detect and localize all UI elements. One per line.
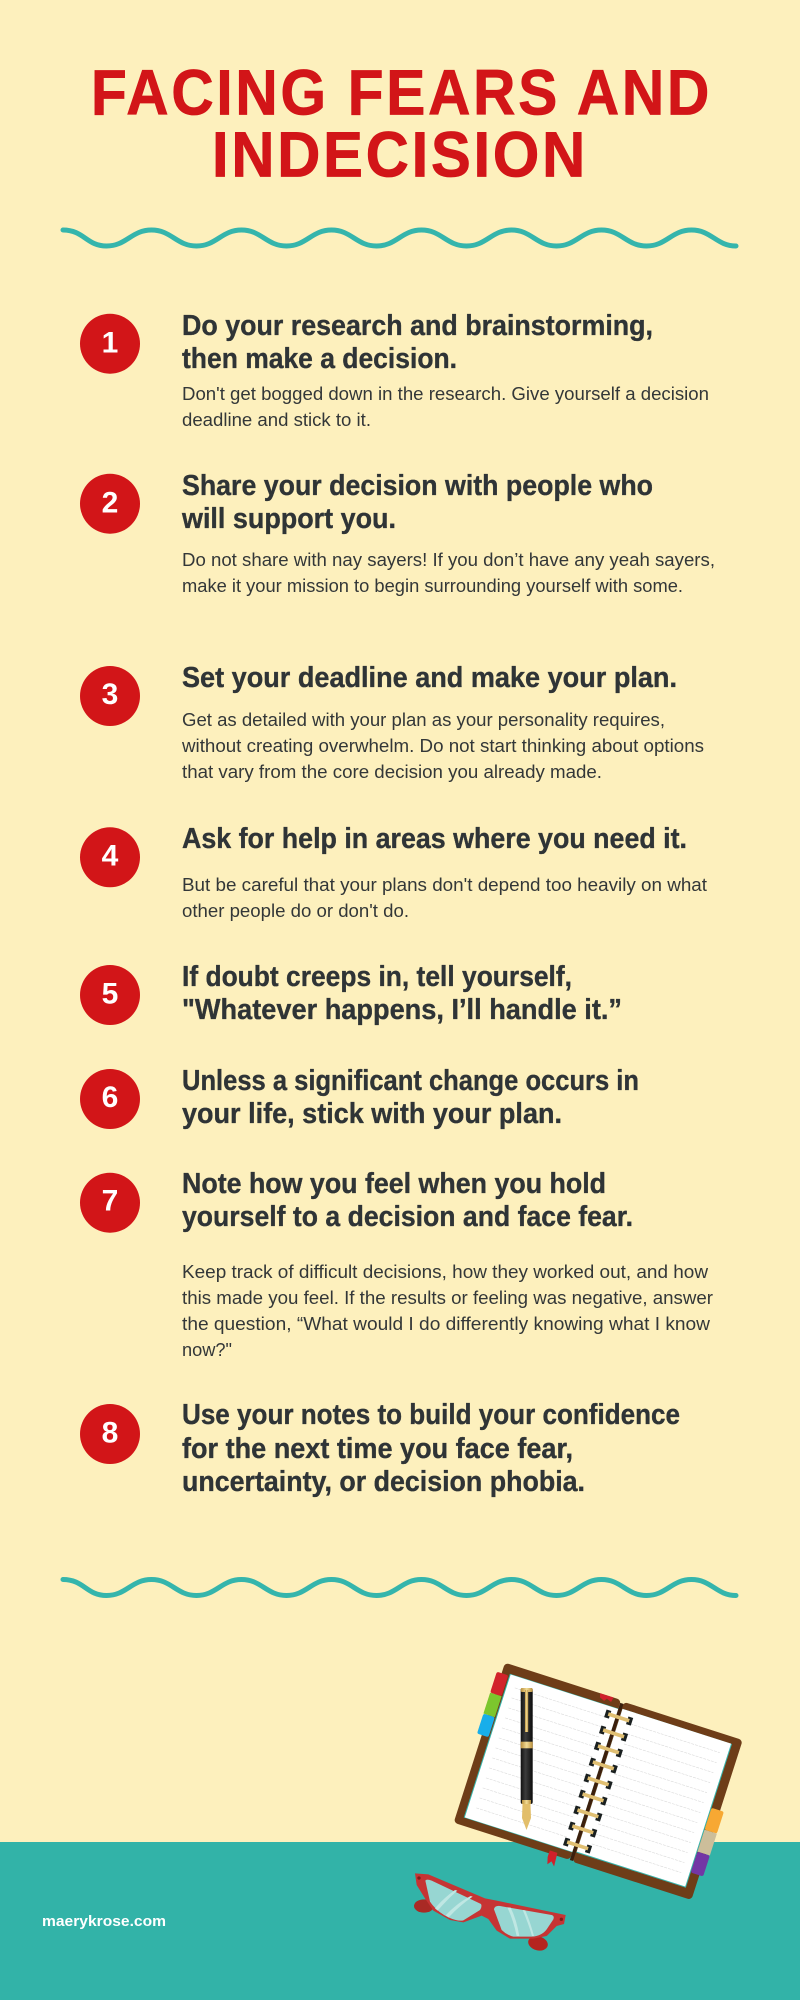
number badge 1 [80, 314, 140, 374]
step 7 heading: Note how you feel when you hold [182, 1168, 606, 1200]
number badge 5 [80, 965, 140, 1025]
step 8 heading [182, 1399, 680, 1498]
step 1 heading: Do your research and brainstorming, [182, 310, 653, 342]
frame rivets [417, 1876, 563, 1921]
step 5 [80, 961, 622, 1026]
number badge 4: 4 [102, 840, 119, 872]
step 2 text [182, 550, 715, 596]
step 8 heading: Use your notes to build your confidence [182, 1399, 680, 1431]
top wavy divider [63, 230, 736, 246]
left page [464, 1674, 618, 1852]
number badge 8: 8 [102, 1416, 118, 1450]
step 4 [80, 823, 707, 921]
title [91, 56, 712, 190]
step 6 heading: Unless a significant change occurs in [182, 1065, 639, 1097]
step 8 heading: uncertainty, or decision phobia. [182, 1466, 585, 1498]
number badge 3: 3 [102, 678, 118, 711]
step 4 text: But be careful that your plans don't depend too heavily on what [182, 875, 707, 895]
number badge 8 [80, 1404, 140, 1464]
title: INDECISION [212, 118, 588, 190]
step 3 text [181, 710, 704, 782]
step 1 heading: then make a decision. [182, 343, 457, 375]
left index tabs [477, 1672, 508, 1737]
step 1 text: deadline and stick to it. [182, 410, 371, 430]
number badge 6 [80, 1069, 140, 1129]
step 3 text: Get as detailed with your plan as your personality requires, [182, 710, 665, 730]
step 8 heading: for the next time you face fear, [182, 1433, 573, 1465]
number badge 1: 1 [102, 326, 118, 360]
number badge 3 [80, 666, 140, 726]
footer website: maerykrose.com [42, 1914, 166, 1930]
left bookmark ribbon [545, 1693, 614, 1868]
icon: open spiral notebook [446, 1661, 747, 1911]
step 7 [80, 1168, 713, 1360]
spiral rings [563, 1709, 633, 1854]
step 8 [80, 1399, 680, 1498]
title: FACING FEARS AND [91, 56, 712, 128]
step 2 [80, 470, 715, 596]
step 7 text [182, 1262, 713, 1360]
frame [415, 1873, 566, 1939]
icon: red glasses [414, 1873, 566, 1953]
step 7 text: the question, “What would I do differently knowing what I know [182, 1314, 711, 1334]
number badge 7 [80, 1173, 140, 1233]
bottom wavy divider [63, 1580, 736, 1596]
step 2 text: Do not share with nay sayers! If you don’t have any yeah sayers, [182, 550, 715, 570]
number badge 6: 6 [102, 1081, 118, 1114]
step 4 text [182, 875, 707, 921]
step 5 heading: "Whatever happens, I’ll handle it.” [182, 994, 622, 1026]
footer band [0, 1842, 800, 2000]
step 4 heading: Ask for help in areas where you need it. [182, 823, 687, 855]
step 6 [80, 1065, 639, 1130]
step 5 heading: If doubt creeps in, tell yourself, [182, 961, 572, 993]
number badge 2: 2 [102, 486, 118, 520]
number badge 4 [80, 827, 140, 887]
ear pieces [414, 1899, 549, 1953]
step 5 heading [182, 961, 622, 1026]
right index tabs [691, 1808, 724, 1877]
number badge 5: 5 [102, 978, 118, 1010]
step 2 heading [181, 470, 653, 535]
step 2 heading: Share your decision with people who [182, 470, 653, 502]
step 7 text: Keep track of difficult decisions, how they worked out, and how [182, 1262, 709, 1282]
step 7 text: now?" [182, 1340, 232, 1360]
step 7 heading [182, 1168, 633, 1233]
step 1 heading [182, 310, 653, 375]
step 2 heading: will support you. [181, 503, 396, 535]
number badge 7: 7 [102, 1184, 118, 1218]
step 7 text: this made you feel. If the results or feeling was negative, answer [182, 1288, 713, 1308]
step 2 text: make it your mission to begin surrounding yourself with some. [182, 576, 683, 596]
number badge 2 [80, 474, 140, 534]
step 3 text: that vary from the core decision you already made. [182, 762, 602, 782]
step 3 [80, 662, 704, 782]
spine [570, 1703, 623, 1861]
step 3 heading: Set your deadline and make your plan. [182, 662, 677, 694]
step 1 [80, 310, 709, 430]
notebook covers [453, 1663, 743, 1900]
icon: fountain pen [521, 1688, 533, 1830]
step 7 heading: yourself to a decision and face fear. [182, 1201, 633, 1233]
right page [576, 1709, 732, 1888]
lenses [425, 1880, 554, 1937]
step 3 text: without creating overwhelm. Do not start thinking about options [181, 736, 704, 756]
step 6 heading: your life, stick with your plan. [182, 1098, 562, 1130]
step 6 heading [182, 1065, 639, 1130]
step 4 text: other people do or don't do. [182, 901, 409, 921]
step 1 text [182, 384, 709, 430]
step 1 text: Don't get bogged down in the research. Give yourself a decision [182, 384, 709, 404]
